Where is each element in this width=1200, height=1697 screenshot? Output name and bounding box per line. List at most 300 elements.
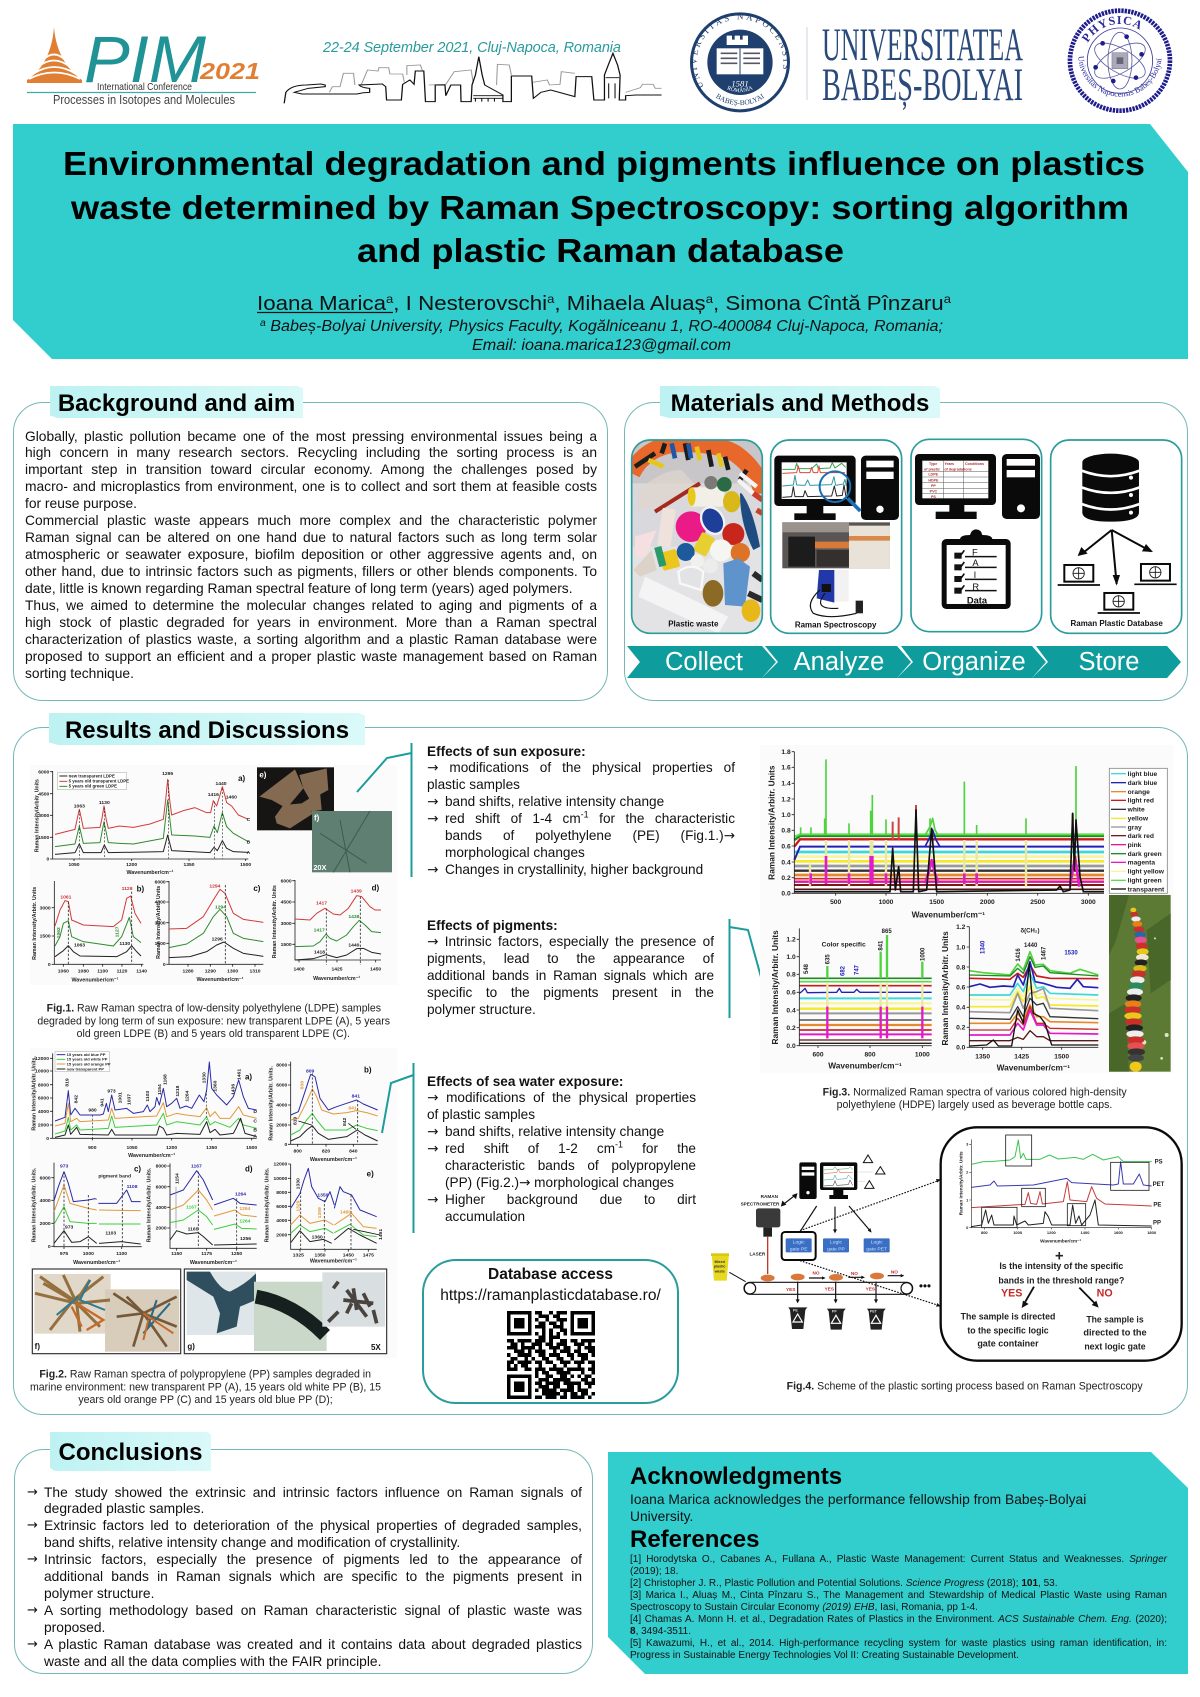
card: database — [1051, 440, 1182, 633]
logic gates: gate PP — [827, 1247, 846, 1253]
legend: sample colours: white — [1127, 807, 1145, 814]
detail callout: 2 — [966, 1170, 969, 1175]
text block: acknowledgment: Ioana Marica acknowledges the performance fellowship from Babeș-Bolyai — [630, 1492, 1086, 1506]
conveyor belt: YES — [786, 1287, 795, 1292]
heading: materials and methods: Materials and Methods — [671, 390, 929, 417]
icons: resin codes — [863, 1155, 885, 1188]
chart a: 1461 — [236, 1069, 242, 1080]
logic gates — [782, 1232, 890, 1260]
chart a: 15 years old white PP — [67, 1057, 108, 1062]
chart a: 1264 — [184, 1090, 190, 1102]
text block: sun exposure — [427, 744, 736, 878]
chart e: 4000 — [276, 1218, 288, 1224]
chart d — [272, 878, 381, 982]
chart d: 1256 — [240, 1236, 251, 1242]
authors: , Mihaela Aluaș — [554, 292, 706, 315]
chart: full range spectra: 1500 — [929, 899, 944, 906]
chart c: 1294 — [209, 883, 221, 889]
photo panel g: micro fragments — [184, 1269, 387, 1354]
chart c: 973 — [65, 1225, 74, 1231]
caption: figure 3 — [823, 1086, 1127, 1111]
card label: database: Raman Plastic Database — [1070, 619, 1163, 628]
chart b: 1100 — [97, 968, 108, 974]
chart a — [35, 769, 251, 876]
detail callout: 1 — [966, 1197, 969, 1202]
caption: figure 2: marine environment: new transparent PP (A), 15 years old white PP (B), 15 — [30, 1381, 381, 1393]
seal year: 1581 — [731, 79, 749, 89]
chart a: 4500 — [38, 791, 50, 797]
text block: references: [5] Kawazumi, H., et al., 2014. High-performance recycling system for waste plastics using raman identification, in: — [630, 1638, 1167, 1649]
chart b: 820 — [322, 1149, 330, 1155]
legend: sample colours: pink — [1128, 842, 1142, 849]
affiliation: a — [260, 318, 266, 329]
chart a: Wavenumber/cm⁻¹ — [128, 1153, 175, 1159]
chart e: 1350 — [314, 1253, 326, 1259]
conference subtitle: Processes in Isotopes and Molecules — [53, 93, 235, 107]
title — [63, 146, 1145, 270]
chart c: 1280 — [182, 968, 194, 974]
step labels: Organize — [922, 648, 1026, 676]
chart a: new transparent LDPE — [69, 773, 115, 778]
date text: 22-24 September 2021, Cluj-Napoca, Romania — [322, 40, 621, 56]
chart: CH2 bending range: Wavenumber/cm⁻¹ — [997, 1063, 1070, 1073]
logic gates: gate PE — [790, 1247, 808, 1253]
text block: sun exposure: Effects of sun exposure: — [427, 744, 586, 758]
text block: background: atmospheric or seawater exposure, biofilm deposition or other aggressive agents and, on — [25, 547, 597, 562]
chart a: 1218 — [175, 1085, 181, 1097]
detail callout: 3 — [966, 1142, 969, 1147]
legend: sample colours: magenta — [1128, 860, 1155, 867]
conveyor belt: NO — [813, 1270, 820, 1275]
chart a: 1200 — [166, 1145, 177, 1151]
chart: full range spectra: 0.6 — [781, 843, 791, 850]
chart: color specific range: Raman Intensity/Arbitr. Units — [770, 930, 780, 1044]
header: conference date and skyline — [284, 40, 662, 104]
chart: full range spectra: 1.8 — [781, 749, 791, 756]
chart d: 1154 — [174, 1173, 180, 1184]
logic gates: Logic — [871, 1240, 883, 1246]
authors: , Simona Cîntă Pînzaru — [713, 292, 944, 315]
detail callout: + — [1055, 1249, 1064, 1265]
chart: CH2 bending range: 0.2 — [956, 1025, 966, 1032]
caption: figure 3: polyethylene (HDPE) largely used as beverage bottle caps. — [837, 1099, 1112, 1111]
detail callout: PP — [1153, 1221, 1161, 1227]
chart e: 1360 — [312, 1235, 323, 1241]
seal lower inscription: BABEȘ-BOLYAI — [716, 93, 764, 106]
chart c: 1300 — [227, 968, 238, 974]
chart a: 0 — [47, 857, 50, 863]
panel: database access — [422, 1259, 679, 1404]
chart: color specific range: 635 — [825, 954, 831, 964]
chart a: 1436 — [230, 1084, 236, 1095]
chart: color specific range: 548 — [804, 963, 810, 974]
chart e: 1460 — [340, 1210, 351, 1216]
header: university name — [806, 22, 1023, 110]
chart a: 1130 — [99, 800, 110, 806]
chart b — [32, 881, 147, 984]
detail callout — [941, 1127, 1182, 1361]
chart a: 10000 — [35, 1069, 49, 1075]
chart: CH2 bending range: 0.8 — [956, 964, 966, 971]
text block: pigments: → Intrinsic factors, especially the presence of — [427, 934, 714, 950]
chart d: 1264 — [239, 1219, 251, 1225]
chart d: 1264 — [239, 1206, 251, 1212]
chart a: 1416 — [208, 792, 219, 798]
text block: conclusions: additional bands in Raman signals which are specific to the pigments present in — [44, 1569, 582, 1584]
text block: sun exposure: Changes in crystallinity, higher background — [445, 862, 703, 877]
chart: color specific range: 800 — [864, 1051, 876, 1058]
chart d: 1175 — [201, 1251, 212, 1257]
chart a: 5 years old green LDPE — [69, 784, 117, 789]
email: Email: ioana.marica123@gmail.com — [472, 337, 731, 354]
caption: figure 2 — [30, 1369, 381, 1406]
text block: conclusions: The study showed the extrinsic and intrinsic factors influence on Raman signals of — [44, 1484, 582, 1500]
chart e: 1359 — [317, 1207, 323, 1218]
text block: sea water exposure: accumulation — [445, 1209, 525, 1224]
chart: full range spectra: 0.4 — [781, 859, 791, 866]
chart d: 2000 — [156, 1226, 167, 1232]
heading: references: References — [630, 1526, 759, 1553]
detail callout: Wavenumber/cm⁻¹ — [1040, 1238, 1082, 1243]
chart a: 900 — [88, 1145, 97, 1151]
chart: color specific range: 0.2 — [786, 1025, 796, 1032]
chart b: b) — [364, 1066, 372, 1075]
chart a: 6000 — [38, 1096, 49, 1102]
chart e: 1330 — [295, 1178, 301, 1189]
chart: CH2 bending range: 1500 — [1054, 1053, 1069, 1060]
chart: color specific range: 747 — [854, 964, 860, 975]
chart d: d) — [372, 883, 380, 892]
text block: pigments: specific to the pigments present in the — [427, 985, 714, 1000]
data label: Data — [967, 596, 988, 606]
chart b: 1120 — [117, 968, 128, 974]
chart: full range spectra: 0.0 — [781, 891, 791, 898]
data table text: of plastic — [924, 467, 940, 471]
text block: sun exposure: → — [427, 862, 438, 878]
legend: sample colours: dark green — [1128, 851, 1162, 858]
text block: background: important step in transition toward circular economy. Among the challenges posed by — [25, 462, 597, 477]
text block: acknowledgment: University. — [630, 1508, 693, 1524]
chart e: 1325 — [293, 1253, 304, 1259]
chart c: 1103 — [105, 1230, 116, 1236]
detail callout: 1600 — [1114, 1230, 1124, 1235]
text block: sea water exposure: Effects of sea water exposure: — [427, 1074, 623, 1088]
chart b: 809 — [299, 1081, 305, 1089]
chart c: c) — [253, 884, 261, 893]
chart c: 1310 — [249, 968, 261, 974]
chart e: 2000 — [276, 1232, 288, 1238]
header: university seal — [690, 12, 790, 112]
chart a: 1063 — [74, 804, 85, 810]
photo f: microscope image: f) — [314, 814, 320, 823]
chart a: 4000 — [38, 1109, 49, 1115]
process chevrons — [627, 646, 1181, 678]
chart e: 1461 — [378, 1229, 384, 1240]
chart: full range spectra: Wavenumber/cm⁻¹ — [912, 909, 985, 919]
chart e: Wavenumber/cm⁻¹ — [310, 1259, 357, 1265]
chart b: 810 — [293, 1116, 299, 1125]
chart d: 1250 — [231, 1251, 242, 1257]
chart c — [31, 1163, 142, 1266]
data table text: Conditions — [965, 462, 984, 466]
chart c: 1294 — [215, 905, 226, 911]
chart c: 6000 — [155, 879, 166, 885]
panel: background and aim — [13, 386, 608, 701]
legend: sample colours: light blue — [1128, 771, 1158, 778]
logic gates: Logic — [830, 1240, 842, 1246]
detail callout: bands in the threshold range? — [998, 1276, 1124, 1286]
text block: conclusions — [27, 1484, 582, 1669]
authors: a — [547, 292, 555, 306]
detail callout: directed to the — [1083, 1328, 1147, 1338]
chart a: Raman Intensity/Arbitr. Units — [35, 779, 41, 852]
chart: full range spectra: 2500 — [1030, 899, 1045, 906]
chart c: 3000 — [155, 920, 166, 926]
chart d: 1418 — [314, 949, 325, 955]
heading: conclusions: Conclusions — [58, 1439, 202, 1466]
chart a: 1500 — [240, 862, 251, 868]
chart d: d) — [245, 1165, 253, 1174]
chart d: Wavenumber/cm⁻¹ — [313, 976, 360, 982]
text block: conclusions: Extrinsic factors led to deterioration of the physical properties of degraded samples, — [44, 1518, 582, 1533]
chart c: 4000 — [40, 1198, 51, 1204]
text block: conclusions: degraded plastic samples. — [44, 1501, 204, 1516]
chart: CH2 bending range — [940, 924, 1098, 1073]
chart: full range spectra: 0.8 — [781, 828, 791, 835]
chart d: 1440 — [348, 943, 360, 949]
chart a: 1168 — [162, 1074, 168, 1085]
title: and plastic Raman database — [357, 233, 844, 270]
chart: color specific range: 600 — [812, 1051, 824, 1058]
chart c: 1296 — [212, 937, 223, 943]
chart: color specific range: 1000 — [920, 947, 926, 961]
chart b: 1060 — [58, 968, 69, 974]
text block: pigments: Effects of pigments: — [427, 918, 558, 932]
text block: conclusions: → — [27, 1484, 38, 1500]
header: conference logo — [27, 22, 260, 107]
chart d: 1150 — [171, 1251, 182, 1257]
spectrometer: LASER — [749, 1252, 766, 1257]
chart c: 973 — [60, 1163, 69, 1169]
chart: full range spectra: 500 — [830, 899, 842, 906]
chart a: C — [247, 817, 251, 823]
chart b: 1063 — [74, 943, 85, 949]
text block: background — [25, 428, 598, 681]
chart a: C — [253, 1119, 257, 1125]
chart: full range spectra: 2000 — [980, 899, 995, 906]
chart: CH2 bending range: 0.0 — [956, 1045, 966, 1052]
chart b: 1127 — [115, 926, 121, 937]
chart a: 3000 — [38, 813, 50, 819]
text block: background: macro- and microplastics from environment, one is to collect and sort them at feasible costs — [25, 479, 597, 494]
text block: conclusions: waste and all the data complies with the FAIR principle. — [44, 1654, 381, 1669]
chart a: 6000 — [38, 769, 50, 775]
chart: CH2 bending range: 1530 — [1064, 951, 1078, 957]
chart a: 1460 — [226, 794, 237, 800]
chart a: A — [253, 1134, 257, 1140]
seal inscription: UNIVERSITAS NAPOCENSIS — [693, 15, 787, 88]
title banner — [13, 124, 1188, 359]
text block: sea water exposure: (PP) (Fig.2.)→ morphological changes — [445, 1175, 674, 1191]
heading: background and aim: Background and aim — [58, 390, 295, 417]
chart a: a) — [238, 774, 246, 783]
chart b: 841 — [352, 1093, 360, 1099]
text block: references: Spectroscopy to Sustain Circular Economy (2019) EHB, Iasi, Romania, pp 1-4. — [630, 1602, 978, 1613]
text block: sun exposure: → — [427, 794, 438, 810]
detail callout: to the specific logic — [967, 1325, 1049, 1335]
chart a: 1295 — [162, 771, 173, 777]
photo f: microscope image: 20X — [313, 863, 326, 872]
chart: CH2 bending range: δ(CH₂) — [1021, 929, 1039, 935]
chart: color specific range: 841 — [879, 940, 885, 951]
chart a: 1154 — [157, 1084, 163, 1095]
text block: background: Thus, we aimed to determine the molecular changes related to aging and pigments of a — [25, 598, 597, 613]
text block: sun exposure: band shifts, relative intensity change — [445, 794, 664, 809]
chart: CH2 bending range: 1.2 — [956, 924, 966, 931]
chart a: 973 — [107, 1089, 116, 1095]
chart e: 6000 — [276, 1204, 288, 1210]
chart a: 1330 — [202, 1072, 208, 1083]
chart d: Wavenumber/cm⁻¹ — [190, 1260, 237, 1266]
text block: references: [4] Chamas A. Monn H. et al., Degradation Rates of Plastics in the Environment. ACS Sustainable Chem. Eng. (2020); — [630, 1614, 1167, 1625]
sorted bins: PE — [793, 1308, 798, 1312]
chart b: 1061 — [60, 894, 72, 900]
chart d: 1450 — [370, 967, 381, 973]
mixed waste bin: Mixed — [714, 1260, 725, 1264]
legend: sample colours: light red — [1128, 798, 1154, 805]
chart a: 5 years old transparent LDPE — [69, 779, 129, 784]
chart a: 941 — [99, 1098, 105, 1107]
detail callout: YES — [1001, 1288, 1022, 1300]
chart b: Wavenumber/cm⁻¹ — [310, 1157, 357, 1163]
caption: figure 1 — [37, 1003, 390, 1040]
QR code — [507, 1311, 595, 1399]
method cards — [630, 438, 1182, 634]
legend: sample colours: yellow — [1128, 816, 1149, 823]
chart c: 1100 — [116, 1251, 127, 1257]
mixed waste bin — [711, 1253, 746, 1282]
text block: sea water exposure: → — [427, 1192, 438, 1208]
chart b: b) — [137, 885, 145, 894]
icon: city skyline — [284, 53, 662, 103]
chart b: Raman Intensity/Arbitr. Units. — [268, 1066, 274, 1141]
authors: a — [944, 292, 951, 306]
data table text: LDPE — [928, 473, 939, 477]
step labels: Collect — [665, 648, 743, 676]
chart d: 6000 — [156, 1184, 167, 1190]
text block: sun exposure: red shift of 1-4 cm-1 for the characteristic — [445, 810, 735, 826]
chart b: 809 — [306, 1068, 315, 1074]
chart d: 1417 — [314, 928, 325, 934]
chart d: 1264 — [235, 1192, 246, 1198]
chart: color specific range: 865 — [882, 929, 892, 935]
chart e: 8000 — [276, 1190, 288, 1196]
photo e: degraded film — [257, 767, 334, 830]
chart e: 10000 — [273, 1176, 288, 1182]
title: Environmental degradation and pigments influence on plastics — [63, 146, 1145, 183]
chart b: Wavenumber/cm⁻¹ — [71, 978, 119, 984]
text block: background: Globally, plastic pollution became one of the most pressing environmental issues being a — [25, 428, 597, 444]
text block: conclusions: proposed. — [44, 1620, 105, 1635]
affiliation: Babeș-Bolyai University, Physics Faculty, Kogălniceanu 1, RO-400084 Cluj-Napoca, Romania; — [266, 318, 943, 335]
chart e — [264, 1162, 384, 1265]
chart a: 1200 — [126, 862, 137, 868]
detail callout: The sample is — [1086, 1314, 1144, 1324]
chart b: 841 — [348, 1105, 357, 1111]
chart d: 1167 — [186, 1204, 197, 1210]
chart: full range spectra: 1.6 — [781, 765, 791, 772]
chart b — [268, 1062, 378, 1163]
text block: sea water exposure: red shift of 1-2 cm-1 for the — [445, 1140, 696, 1156]
chart a: Wavenumber/cm⁻¹ — [126, 870, 174, 876]
conveyor belt — [744, 1270, 931, 1303]
detail callout: next logic gate — [1084, 1341, 1146, 1351]
connector: sun exposure — [356, 743, 412, 877]
text block: conclusions: A plastic Raman database was created and it contains data about degraded plastics — [44, 1637, 582, 1652]
text block: references: [2] Christopher J. R., Plastic Pollution and Potential Solutions. Science Progress (2018); 101, 53. — [630, 1578, 1057, 1589]
authors: a — [706, 292, 713, 306]
chart b: 1128 — [122, 886, 133, 892]
step labels: Analyze — [794, 648, 884, 676]
chart d: 8000 — [156, 1164, 167, 1170]
card label: plastic waste: Plastic waste — [668, 620, 719, 629]
international conference label: International Conference — [97, 81, 192, 93]
chart c: 1108 — [127, 1184, 138, 1190]
chart a: Raman Intensity/Arbitr. Units. — [31, 1056, 37, 1131]
data table text: Type — [929, 462, 937, 466]
text block: sea water exposure: Higher background due to dirt — [445, 1192, 696, 1207]
chart e: 12000 — [273, 1162, 288, 1168]
text block: sea water exposure: of plastic samples — [427, 1107, 535, 1122]
chart d: 3000 — [281, 921, 292, 927]
caption: figure 4: Fig.4. Scheme of the plastic sorting process based on Raman Spectroscopy — [787, 1380, 1143, 1392]
legend: sample colours: gray — [1128, 824, 1142, 831]
detail callout: 0 — [966, 1225, 969, 1230]
chart a: 2000 — [38, 1123, 49, 1129]
database heading: Database access — [488, 1266, 613, 1283]
step labels — [665, 648, 1139, 676]
FAIR letters — [972, 547, 979, 592]
text block: background: high stock of plastic degraded for years in environment. More than a Raman spectral — [25, 615, 597, 630]
chart: CH2 bending range: 1467 — [1041, 946, 1047, 960]
database url: https://ramanplasticdatabase.ro/ — [440, 1287, 661, 1304]
text block: background: Raman signal can be altered on one hand due to natural factors such as long term solar — [25, 530, 597, 545]
chart a: B — [247, 840, 251, 846]
chart d: 1439 — [351, 888, 362, 894]
card: raman spectroscopy — [771, 440, 902, 633]
text block: sun exposure: plastic samples — [427, 777, 520, 792]
chart d: 6000 — [281, 878, 292, 884]
chart a: 980 — [88, 1108, 97, 1114]
chart: CH2 bending range: 1440 — [1024, 943, 1038, 949]
seal country: ROMÂNIA — [727, 86, 753, 92]
chart e: 1359 — [317, 1193, 329, 1199]
text block: background: for reuse purpose. — [25, 496, 137, 511]
chart: color specific range: 1.2 — [786, 937, 796, 944]
chart: full range spectra: Raman Intensity/Arbitr. Units — [767, 765, 777, 880]
authors: a — [386, 292, 394, 306]
conveyor belt: ••• — [919, 1280, 931, 1292]
data table text: PP — [931, 484, 936, 488]
chart: full range spectra: 1.0 — [781, 812, 791, 819]
text block: references: [3] Marica I., Aluaș M., Cinta Pînzaru S., The Management and Stewardship of Medical Plastic Waste using Raman — [630, 1590, 1167, 1601]
chart b: 0 — [285, 1142, 288, 1148]
chart: color specific range — [770, 928, 932, 1071]
chart: CH2 bending range: 1340 — [981, 940, 987, 954]
chart: CH2 bending range: 1425 — [1014, 1053, 1029, 1060]
authors — [257, 292, 951, 315]
chart a: 1500 — [246, 1145, 257, 1151]
